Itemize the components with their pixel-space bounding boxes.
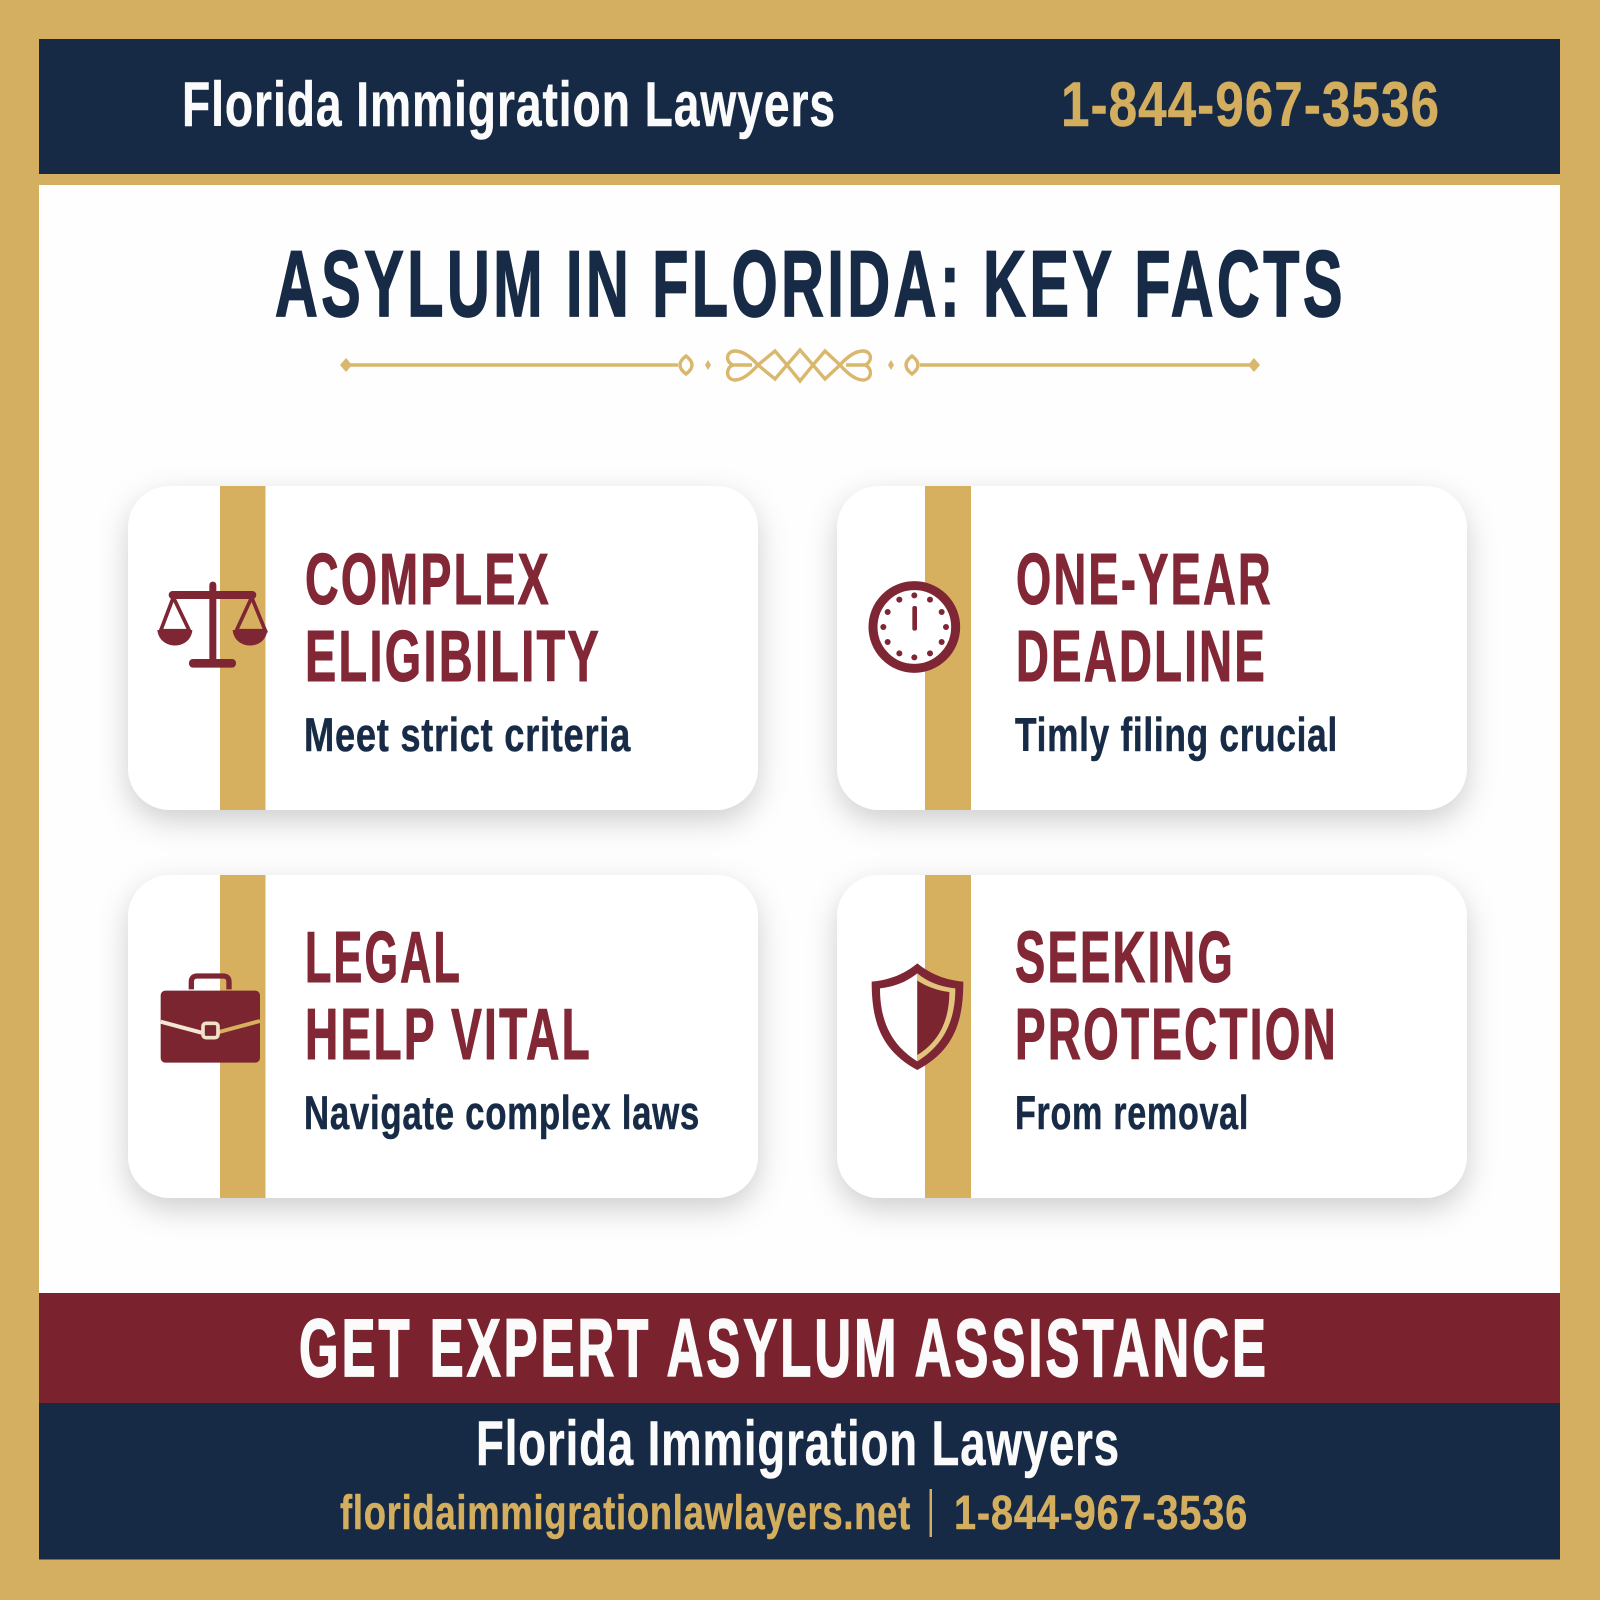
top header band xyxy=(39,39,1560,174)
footer band xyxy=(39,1403,1560,1560)
heading: COMPLEX xyxy=(305,540,551,620)
description: From removal xyxy=(1015,1086,1249,1139)
footer firm name: Florida Immigration Lawyers xyxy=(476,1409,1120,1479)
heading: SEEKING xyxy=(1015,918,1235,998)
header phone number: 1-844-967-3536 xyxy=(1061,70,1440,140)
footer website: floridaimmigrationlawlayers.net xyxy=(340,1487,911,1540)
heading line two: ELIGIBILITY xyxy=(305,617,601,697)
heading line two: PROTECTION xyxy=(1015,995,1338,1075)
icon: shield xyxy=(872,963,963,1070)
icon: clock xyxy=(873,586,956,668)
heading line two: DEADLINE xyxy=(1016,617,1267,697)
call-to-action band xyxy=(39,1293,1560,1403)
description: Navigate complex laws xyxy=(304,1086,700,1139)
panel: one-year deadline xyxy=(837,486,1467,810)
panel: legal help vital xyxy=(128,875,758,1198)
footer phone number: 1-844-967-3536 xyxy=(954,1487,1248,1540)
heading line two: HELP VITAL xyxy=(305,995,592,1075)
ornamental divider xyxy=(340,350,1260,381)
white content panel xyxy=(39,185,1560,1293)
header firm name: Florida Immigration Lawyers xyxy=(182,70,836,140)
icon: scales of justice xyxy=(157,582,267,668)
description: Timly filing crucial xyxy=(1015,708,1338,761)
heading: ONE-YEAR xyxy=(1016,540,1273,620)
icon: briefcase xyxy=(161,976,260,1063)
description: Meet strict criteria xyxy=(304,708,631,761)
footer separator xyxy=(930,1489,932,1537)
heading: LEGAL xyxy=(305,918,462,998)
panel: complex eligibility xyxy=(128,486,758,810)
panel: seeking protection xyxy=(837,875,1467,1198)
